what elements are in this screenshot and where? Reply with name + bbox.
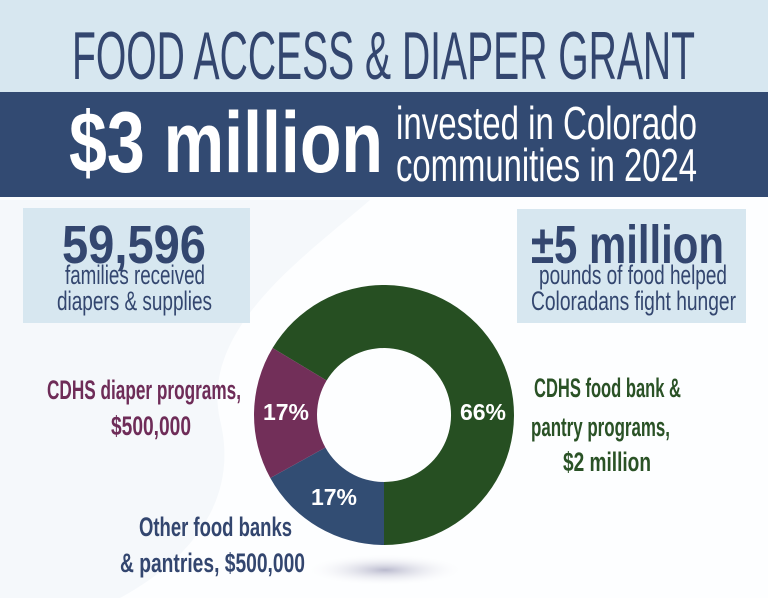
label: diaper programs: $500,000 [111,411,191,441]
donut chart: 66% [460,399,506,425]
shadow [305,554,465,586]
stat box: families: families received [65,260,205,290]
donut chart: 17% [311,484,357,510]
label: other food banks [120,512,305,578]
banner: $3 million [0,92,768,197]
label: food bank programs: pantry programs, [531,412,670,442]
donut chart [254,285,514,545]
label: food bank programs: CDHS food bank & [534,373,681,403]
header band [0,0,768,92]
label: other food banks: & pantries, $500,000 [120,548,305,578]
stat box: families: 59,596 [62,215,206,275]
donut chart: 17% [263,399,309,425]
banner: $3 million: $3 million [69,95,383,191]
label: diaper programs [47,375,241,441]
stat box: pounds of food [517,209,746,323]
stat box: families [23,208,250,323]
label: food bank programs: $2 million [563,447,651,477]
label: diaper programs: CDHS diaper programs, [47,375,241,405]
label: food bank programs [531,373,681,477]
stat box: families: diapers & supplies [57,286,212,316]
label: other food banks: Other food banks [139,512,292,542]
